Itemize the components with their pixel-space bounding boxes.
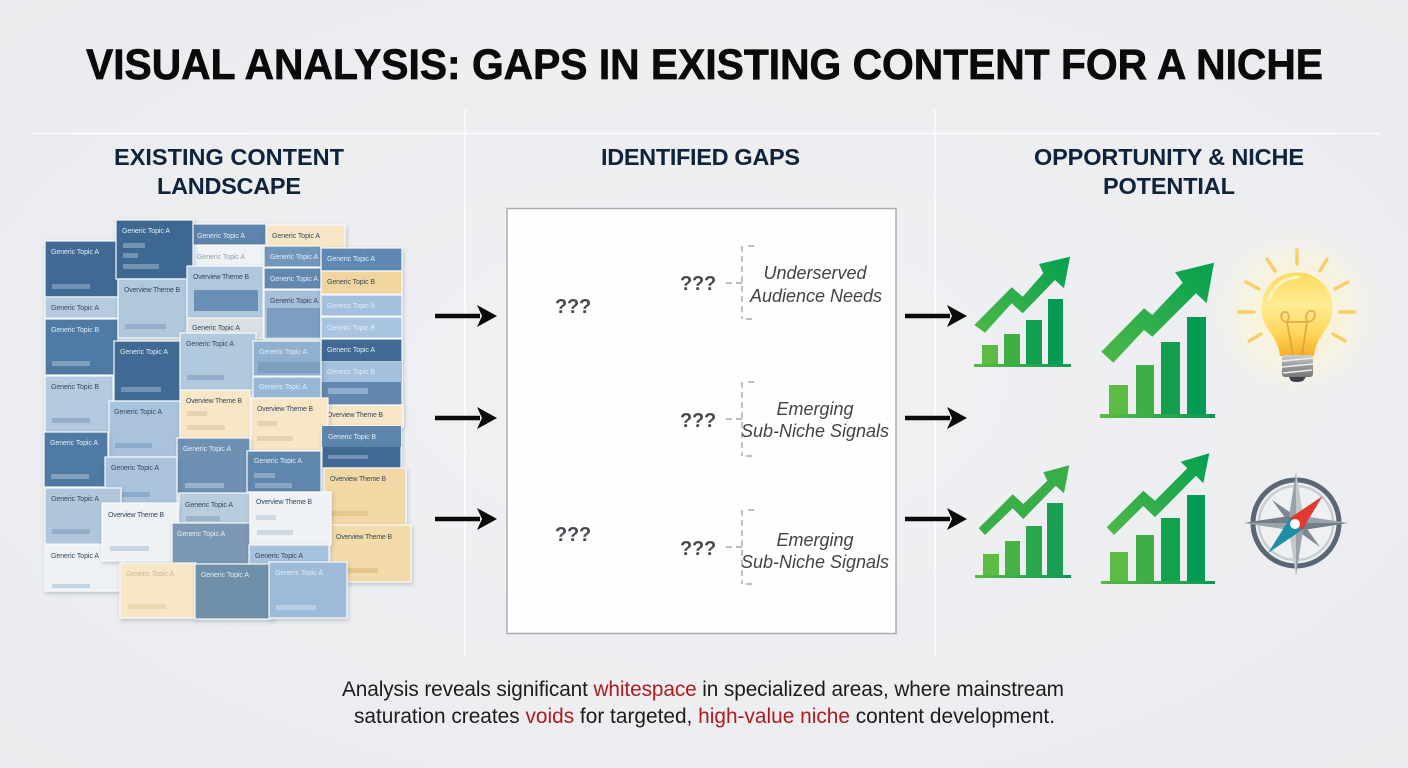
card: Overview Theme B [256,499,312,506]
panel: identified gaps [507,208,896,634]
card: Generic Topic A [259,384,307,391]
title: VISUAL ANALYSIS: GAPS IN EXISTING CONTENT FOR A NICHE [86,41,1323,89]
card [250,492,331,545]
card: Overview Theme B [257,406,313,413]
card: Generic Topic A [185,502,233,509]
card [266,225,345,249]
card: Generic Topic A [51,553,99,560]
card [321,295,402,316]
gap: underserved audience needs: ??? [680,273,716,295]
card: Generic Topic A [177,531,225,538]
card [253,377,321,398]
card [321,271,402,294]
card: Overview Theme B [330,476,386,483]
heading: opportunity and niche potential: OPPORTUNITY & NICHE [1034,144,1304,170]
card [264,290,321,339]
arrow: landscape to gaps, top [435,305,497,327]
card: Generic Topic A [272,233,320,240]
card: Generic Topic A [183,446,231,453]
card: Generic Topic A [275,570,323,577]
card [45,319,118,375]
summary text: saturation creates voids for targeted, high-value niche content development. [354,705,1055,728]
gap: emerging sub-niche signals [680,382,889,456]
heading: opportunity and niche potential: POTENTIAL [1103,173,1235,199]
arrow: gaps to opportunity, bottom [905,508,967,530]
card [269,562,347,618]
card: Generic Topic A [51,305,99,312]
card: Generic Topic A [51,249,99,256]
gap: emerging sub-niche signals: Sub-Niche Signals [741,552,889,572]
card: Generic Topic A [327,256,375,263]
card [195,564,272,619]
card [330,525,411,582]
card [190,246,264,267]
card [321,248,402,271]
gap: underserved audience needs [680,246,882,319]
card [187,318,263,338]
card [116,220,193,279]
card: Generic Topic A [120,349,168,356]
card [321,317,402,338]
card: Overview Theme B [108,512,164,519]
card [251,398,328,452]
arrow: landscape to gaps, middle [435,407,497,429]
card [322,426,401,468]
card [247,451,321,492]
card: Generic Topic B [327,279,375,286]
card: Generic Topic A [327,347,375,354]
card: Generic Topic A [51,496,99,503]
card: Generic Topic A [270,298,318,305]
card: Generic Topic A [327,303,375,310]
card: Generic Topic A [254,458,302,465]
gap: emerging sub-niche signals [680,510,889,584]
card [118,279,188,338]
card: Generic Topic A [114,409,162,416]
card: Generic Topic A [270,276,318,283]
card [45,241,118,297]
card: Generic Topic B [327,369,375,376]
icon: compass [1244,472,1348,576]
card [109,401,180,457]
card [179,493,250,524]
heading: existing content landscape: LANDSCAPE [157,173,301,199]
card: Generic Topic A [197,233,245,240]
card [45,376,113,433]
card [180,390,250,438]
gap: emerging sub-niche signals: ??? [680,538,716,560]
card [322,405,403,427]
card: Generic Topic A [111,465,159,472]
arrow: gaps to opportunity, middle [905,407,967,429]
heading: opportunity and niche potential [1034,144,1304,199]
card [264,268,321,289]
gap: underserved audience needs: Underserved [763,263,868,283]
card [324,468,406,525]
card [249,545,329,567]
card [190,224,267,245]
card [187,266,263,320]
card: Generic Topic A [270,254,318,261]
icon: growth chart 2 [1100,263,1215,418]
unknown marker: ??? [555,524,591,546]
gap: emerging sub-niche signals: Emerging [776,399,854,419]
card: Generic Topic B [327,325,375,332]
card: Generic Topic B [328,434,376,441]
card: Generic Topic A [50,440,98,447]
card [120,563,196,618]
icon: growth chart 3 [975,465,1071,578]
card: Generic Topic B [51,327,99,334]
card: Generic Topic A [201,572,249,579]
card [180,333,256,390]
card [172,523,250,564]
card: Overview Theme B [327,412,383,419]
card [45,297,118,318]
card [264,246,321,267]
card [253,341,321,376]
card: Generic Topic A [192,325,240,332]
card: Generic Topic A [186,341,234,348]
card: Overview Theme B [186,398,242,405]
heading: identified gaps: IDENTIFIED GAPS [601,144,800,170]
icon: growth chart 4 [1101,453,1215,584]
card: Generic Topic A [259,349,307,356]
heading: existing content landscape: EXISTING CONTENT [114,144,345,170]
card [44,432,108,487]
card: Generic Topic B [51,384,99,391]
heading: existing content landscape [114,144,345,199]
arrow: landscape to gaps, bottom [435,508,497,530]
unknown marker: ??? [555,296,591,318]
icon: light bulb [1205,220,1389,404]
card: Overview Theme B [193,274,249,281]
card [105,457,177,507]
card: Generic Topic A [255,553,303,560]
icon: growth chart 1 [974,257,1071,367]
card [45,488,121,544]
card: Generic Topic A [126,571,174,578]
summary text: Analysis reveals significant whitespace in specialized areas, where mainstream [342,678,1064,701]
card [321,339,402,362]
gap: emerging sub-niche signals: Sub-Niche Signals [741,421,889,441]
card [102,503,178,561]
card [45,545,125,591]
card: Generic Topic A [197,254,245,261]
card: Generic Topic A [122,228,170,235]
arrow: gaps to opportunity, top [905,305,967,327]
gap: underserved audience needs: Audience Needs [749,286,882,306]
gap: emerging sub-niche signals: Emerging [776,530,854,550]
card [177,438,250,494]
summary text [342,678,1064,728]
card [114,341,182,401]
panel: existing content card collage [44,220,411,619]
gap: emerging sub-niche signals: ??? [680,410,716,432]
card: Overview Theme B [336,534,392,541]
card: Overview Theme B [124,287,180,294]
card [321,362,402,406]
